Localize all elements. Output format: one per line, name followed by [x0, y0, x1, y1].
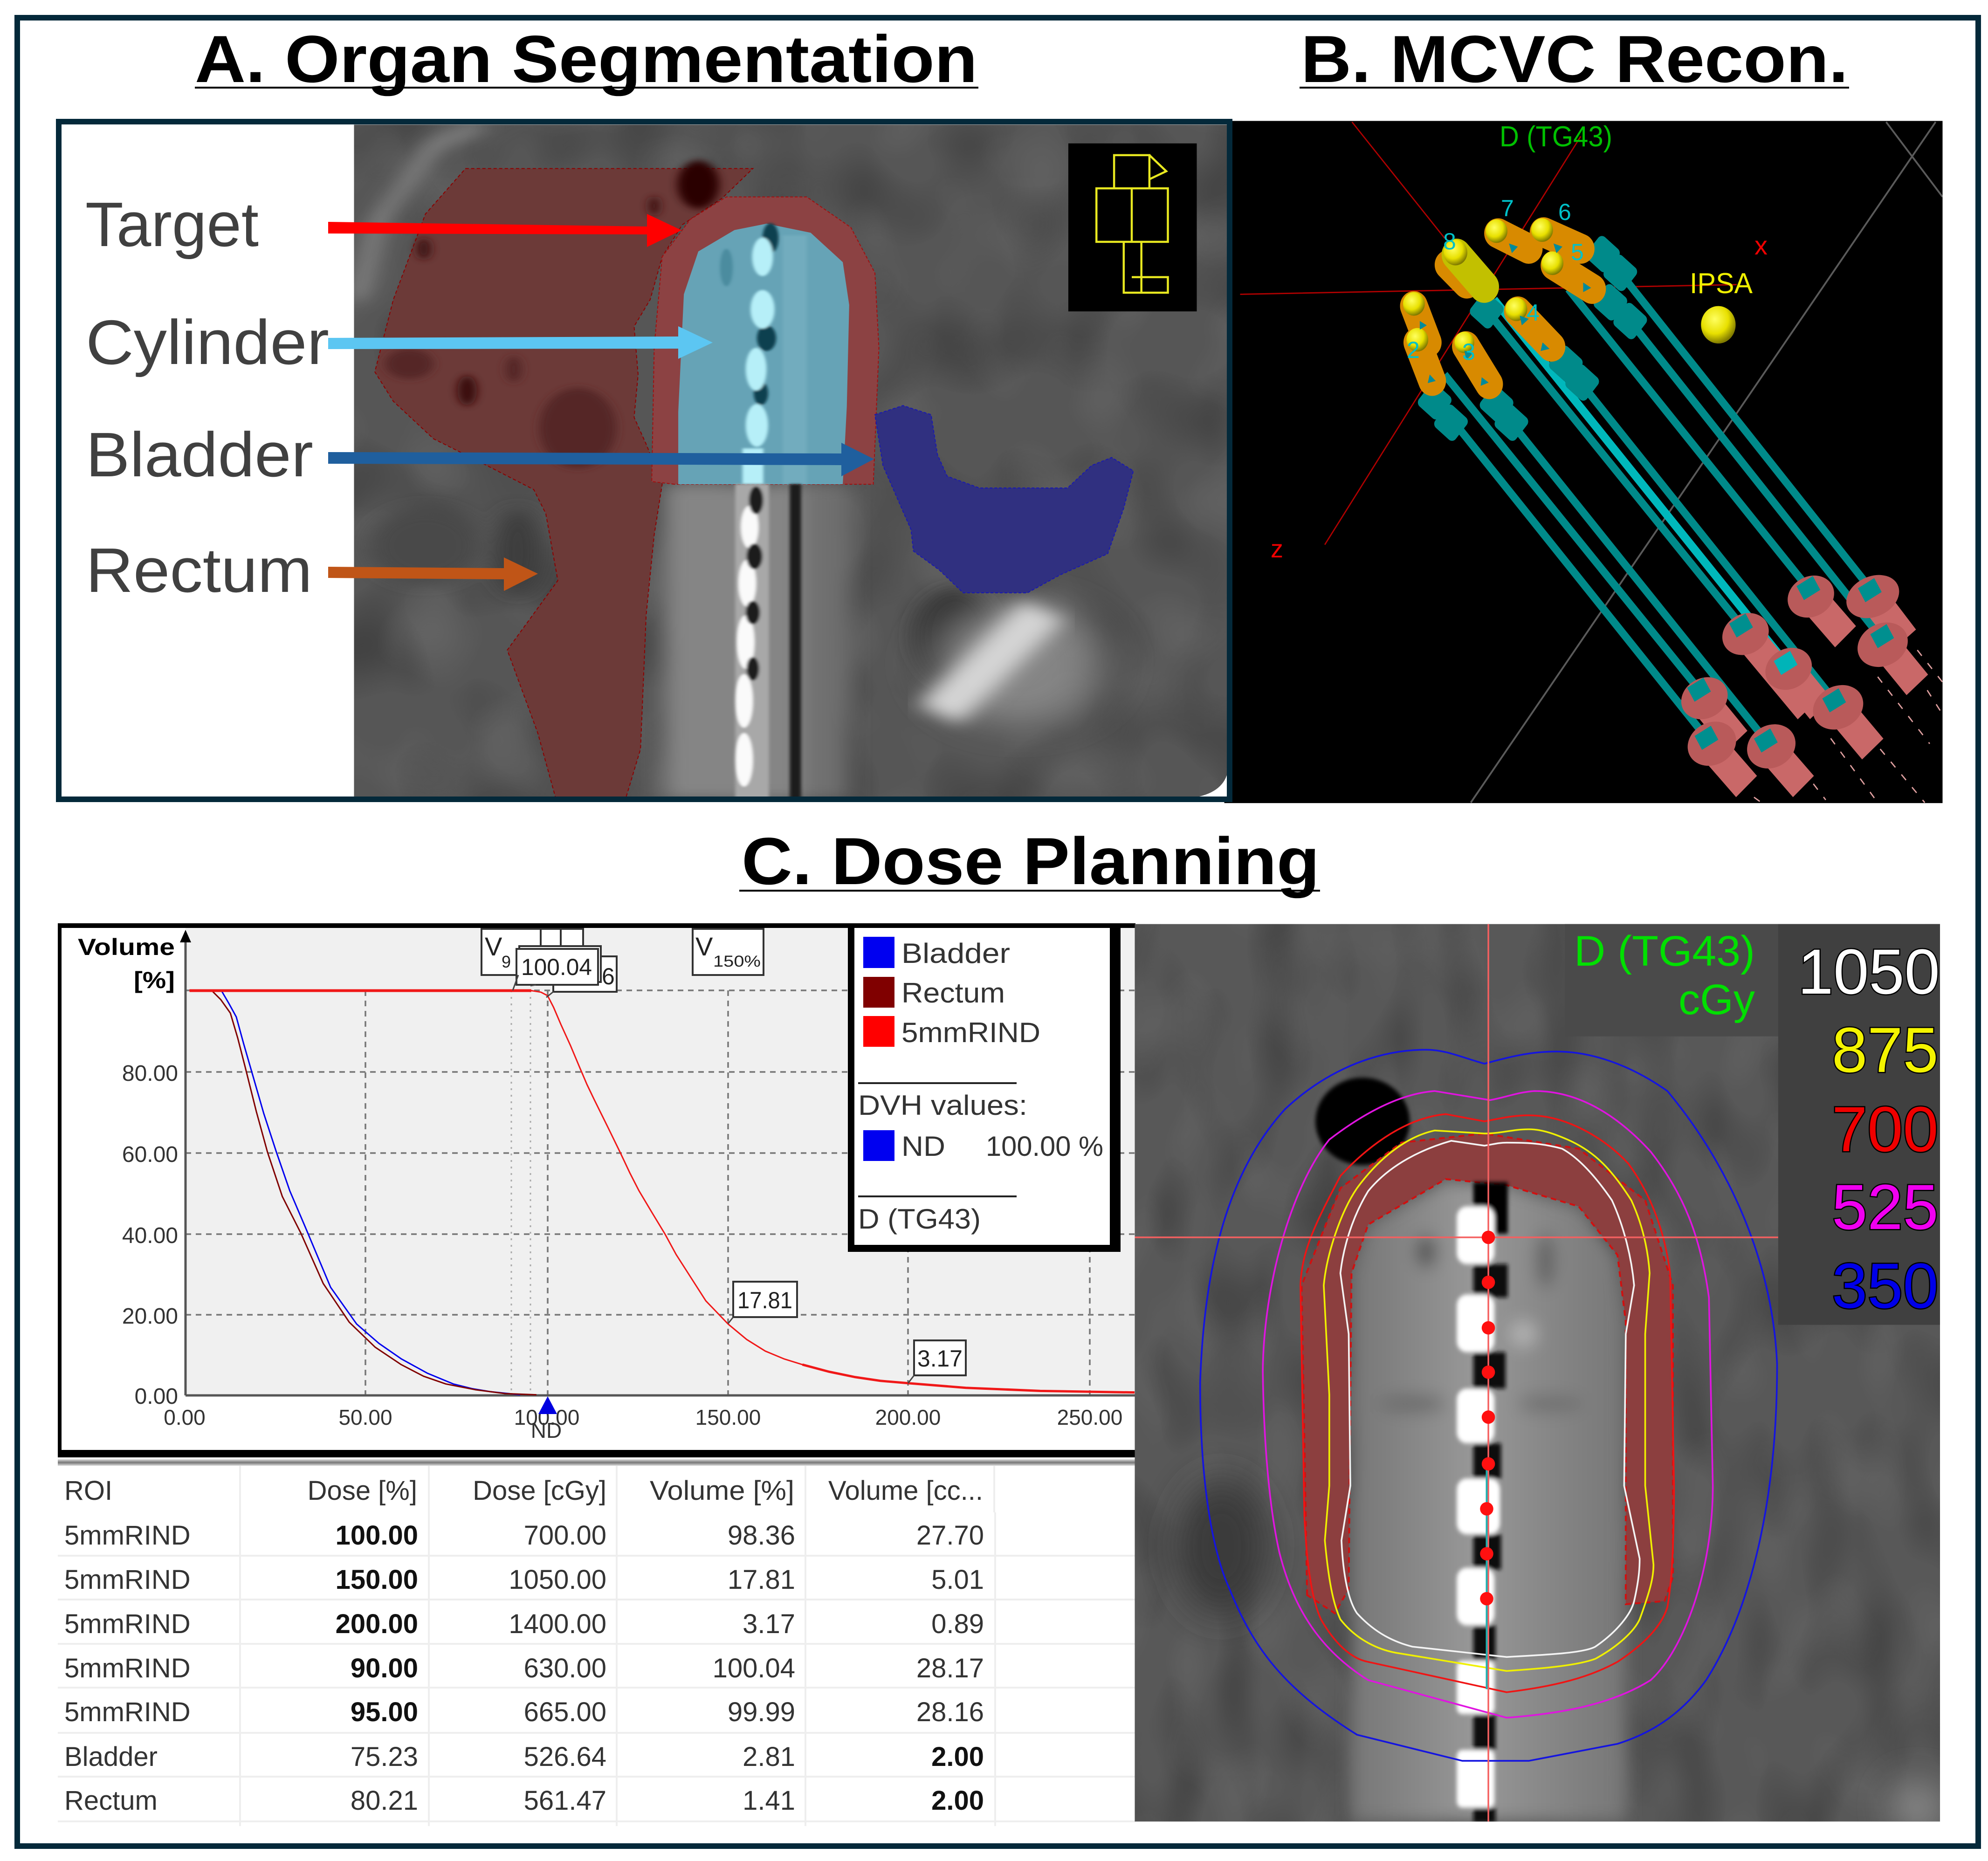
arrow: bladder	[328, 443, 874, 476]
table rows: 90.00	[351, 1653, 418, 1683]
chart: dose volume histogram: 150%	[713, 953, 761, 970]
marker: ND triangle: ND	[531, 1418, 562, 1442]
legend: ND	[901, 1131, 945, 1162]
isodose 700 cGy	[1300, 1114, 1674, 1692]
table rows: 2.00	[931, 1785, 984, 1816]
chart: dose volume histogram: 100.04	[521, 954, 592, 980]
arrow: target	[328, 214, 681, 247]
MRI image with contours	[354, 124, 1237, 800]
table rows: 28.16	[916, 1697, 984, 1727]
table rows: 95.00	[351, 1697, 418, 1727]
bladder structure	[875, 405, 1133, 593]
curve: rectum	[212, 990, 537, 1395]
panel: MCVC reconstruction 3D view	[1224, 121, 1943, 803]
marker: ND triangle	[531, 1396, 562, 1442]
applicator grey region	[1351, 1179, 1626, 1821]
target rind	[652, 197, 879, 484]
y axis labels: 0.00	[135, 1384, 178, 1409]
yellow tips	[1403, 218, 1563, 353]
label: D (TG43) cGy	[1574, 927, 1755, 1023]
x axis labels: 200.00	[875, 1405, 941, 1429]
axes	[186, 932, 1135, 1395]
y axis labels	[122, 1061, 178, 1409]
table rows: 5mmRIND	[64, 1609, 191, 1639]
table rows: 3.17	[743, 1609, 795, 1639]
table rows: 1050.00	[509, 1565, 606, 1595]
plot area	[186, 928, 1135, 1395]
legend	[848, 924, 1121, 1252]
arrow: rectum	[328, 557, 538, 591]
table rows: 5mmRIND	[64, 1653, 191, 1683]
x axis labels: 50.00	[338, 1405, 392, 1429]
chart: dose volume histogram	[58, 923, 1135, 1457]
label: D (TG43) cGy: cGy	[1678, 976, 1755, 1023]
y axis labels: 60.00	[122, 1142, 178, 1167]
table rows: 2.81	[743, 1742, 795, 1772]
table rows: 5mmRIND	[64, 1520, 191, 1551]
chart: dose volume histogram: 6	[602, 963, 615, 989]
legend: isodose levels: 875	[1832, 1015, 1939, 1086]
table rows: 630.00	[524, 1653, 606, 1683]
legend: isodose levels: 700	[1832, 1094, 1939, 1165]
panel: dose distribution image	[1135, 924, 1945, 1832]
table rows: 99.99	[728, 1697, 795, 1727]
table rows: 27.70	[916, 1520, 984, 1551]
label: Cylinder: Cylinder	[86, 307, 329, 378]
title: C. Dose Planning: C. Dose Planning	[742, 824, 1320, 899]
applicator below target	[735, 484, 801, 800]
table rows	[64, 1520, 984, 1816]
label: D (TG43) cGy: D (TG43)	[1574, 927, 1755, 975]
curve: bladder	[221, 990, 520, 1395]
title: A. Organ Segmentation: A. Organ Segmentation	[195, 22, 977, 96]
y axis labels: 40.00	[122, 1223, 178, 1248]
table rows: 75.23	[351, 1742, 418, 1772]
table rows: 5mmRIND	[64, 1565, 191, 1595]
table rows: 1.41	[743, 1785, 795, 1816]
x axis labels: 250.00	[1057, 1405, 1122, 1429]
table rows: 200.00	[336, 1609, 418, 1639]
table header: Volume [%]	[650, 1476, 794, 1506]
label: D (TG43): D (TG43)	[1500, 121, 1612, 153]
IPSA reference sphere	[1701, 306, 1736, 343]
panel: organ segmentation	[59, 122, 1237, 800]
cylinder structure	[678, 224, 849, 484]
table rows: 17.81	[728, 1565, 795, 1595]
table rows: Bladder	[64, 1742, 158, 1772]
label: IPSA: IPSA	[1690, 268, 1753, 300]
crosshair	[1135, 924, 1778, 1821]
chart: dose volume histogram: V	[485, 932, 502, 961]
rectum structure	[375, 169, 753, 797]
table rows: 150.00	[336, 1565, 418, 1595]
axis title: [%]	[134, 967, 175, 993]
label: Target: Target	[85, 189, 259, 260]
table header: Volume [cc...	[828, 1476, 983, 1506]
isodose contours	[1200, 1050, 1777, 1761]
reference axes	[1240, 122, 1943, 803]
curves	[189, 990, 1135, 1395]
target rind dose overlay	[1301, 1133, 1673, 1613]
legend: isodose levels: 525	[1832, 1172, 1939, 1243]
legend: 100.00 %	[986, 1131, 1103, 1162]
legend: isodose levels	[1798, 936, 1940, 1322]
table rows: 5.01	[931, 1565, 984, 1595]
channel line	[1486, 1468, 1487, 1689]
x axis labels	[164, 1405, 1122, 1429]
dwell positions	[1480, 1231, 1495, 1606]
air pocket	[1315, 1078, 1410, 1165]
x axis labels: 0.00	[164, 1405, 206, 1429]
chart: dose volume histogram: 17.81	[737, 1287, 792, 1313]
legend: 5mmRIND	[901, 1017, 1040, 1048]
label: z axis: z	[1271, 535, 1283, 563]
table rows: 98.36	[728, 1520, 795, 1551]
axis title: Volume	[78, 934, 175, 960]
table rows: 80.21	[351, 1785, 418, 1816]
isodose 1050 cGy	[1341, 1141, 1640, 1657]
curve: 5mm rind	[189, 990, 1135, 1393]
isodose 875 cGy	[1324, 1129, 1653, 1671]
channel numbers: 3	[1462, 339, 1475, 365]
table rows: Rectum	[64, 1785, 158, 1816]
source train beads	[1457, 1182, 1508, 1823]
table header	[64, 1476, 983, 1506]
table header: Dose [%]	[308, 1476, 417, 1506]
x axis labels: 100.00	[514, 1405, 579, 1429]
teal connector blocks	[1416, 234, 1649, 443]
isodose 350 cGy	[1200, 1050, 1777, 1761]
legend: isodose levels: 1050	[1798, 936, 1940, 1008]
table: dose metrics	[58, 1459, 1135, 1826]
label: Bladder: Bladder	[86, 419, 313, 490]
table rows: 0.89	[931, 1609, 984, 1639]
table rows: 100.04	[713, 1653, 795, 1683]
catheter direction markers	[1420, 243, 1591, 386]
dose title background	[1565, 924, 1778, 1037]
table header: ROI	[64, 1476, 112, 1506]
table rows: 2.00	[931, 1742, 984, 1772]
frame of panel A	[59, 122, 1230, 799]
table rows: 28.17	[916, 1653, 984, 1683]
table rows: 5mmRIND	[64, 1697, 191, 1727]
y axis labels: 20.00	[122, 1304, 178, 1329]
table rows: 561.47	[524, 1785, 606, 1816]
channel numbers: 7	[1501, 195, 1514, 221]
label: Rectum: Rectum	[86, 535, 312, 605]
title: B. MCVC Recon.: B. MCVC Recon.	[1301, 22, 1848, 96]
icon: orientation inset	[1068, 144, 1197, 311]
chart: dose volume histogram: 9	[502, 952, 511, 971]
isodose 525 cGy	[1263, 1091, 1713, 1718]
channel numbers: 8	[1443, 228, 1456, 254]
chart: dose volume histogram: 3.17	[917, 1346, 963, 1372]
table rows: 700.00	[524, 1520, 606, 1551]
table rows: 665.00	[524, 1697, 606, 1727]
channel numbers	[1407, 195, 1584, 365]
legend: DVH values:	[858, 1090, 1027, 1121]
channel numbers: 6	[1558, 199, 1571, 225]
legend: Bladder	[901, 938, 1010, 969]
catheter dashed extensions	[1754, 650, 1943, 803]
legend: D (TG43)	[858, 1203, 981, 1235]
catheter tubes	[1445, 273, 1880, 741]
legend: isodose levels: 350	[1832, 1250, 1939, 1322]
channel numbers: 2	[1407, 337, 1420, 363]
label: x axis: x	[1754, 231, 1768, 260]
channel numbers: 4	[1527, 300, 1540, 326]
orange applicator capsules	[1414, 232, 1592, 384]
y axis labels: 80.00	[122, 1061, 178, 1086]
x axis labels: 150.00	[695, 1405, 761, 1429]
channel numbers: 5	[1571, 239, 1584, 265]
legend: Rectum	[901, 977, 1005, 1009]
chart: dose volume histogram: V	[695, 932, 713, 961]
table rows: 1400.00	[509, 1609, 606, 1639]
table rows: 100.00	[336, 1520, 418, 1551]
axis title	[78, 934, 175, 993]
value boxes	[482, 929, 966, 1375]
pink catheter hubs	[1676, 567, 1917, 787]
arrow: cylinder	[328, 326, 713, 359]
table rows: 526.64	[524, 1742, 606, 1772]
table header: Dose [cGy]	[473, 1476, 606, 1506]
isodose legend background	[1778, 924, 1940, 1325]
